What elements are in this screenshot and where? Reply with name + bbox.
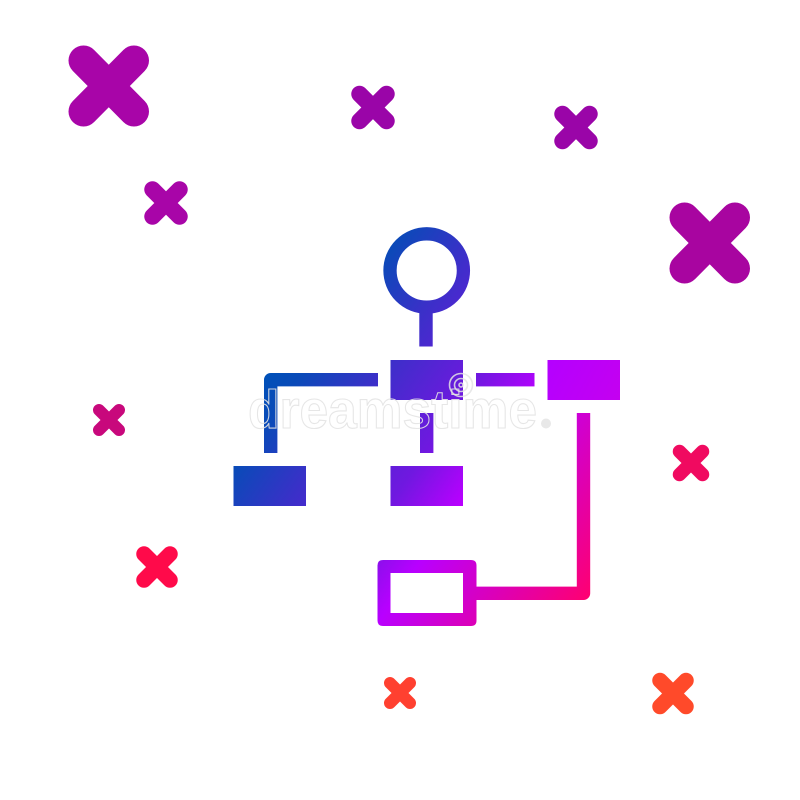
icon: decorative cross small right: [680, 452, 702, 474]
connector: right box to outlined box: [470, 413, 584, 593]
box bottom left: [234, 466, 306, 506]
icon: decorative cross top right: [562, 114, 590, 141]
box right: [548, 360, 620, 400]
icon: decorative cross bottom center: [390, 683, 410, 703]
icon: decorative cross small left: [99, 410, 119, 430]
icon: decorative cross left: [152, 190, 180, 216]
icon: decorative cross lower left: [144, 554, 170, 580]
watermark: [248, 374, 551, 440]
watermark text: dreamstime: [248, 380, 537, 440]
connector: process to bottom box: [420, 413, 433, 453]
connector: process to left branch: [271, 380, 378, 453]
connector: circle to process: [419, 312, 433, 346]
icon: decorative cross bottom right: [660, 680, 686, 706]
flowchart diagram: [234, 234, 620, 626]
connector: process to right box: [476, 373, 534, 386]
outlined box: [378, 560, 476, 626]
icon: decorative cross large top left: [84, 60, 134, 112]
icon: decorative cross top center: [360, 94, 386, 121]
icon: decorative cross large right: [684, 218, 735, 268]
watermark dot: [541, 418, 551, 428]
watermark spiral: [450, 374, 472, 396]
box bottom center: [390, 466, 463, 506]
start node circle: [390, 234, 463, 307]
process box center: [390, 360, 463, 400]
